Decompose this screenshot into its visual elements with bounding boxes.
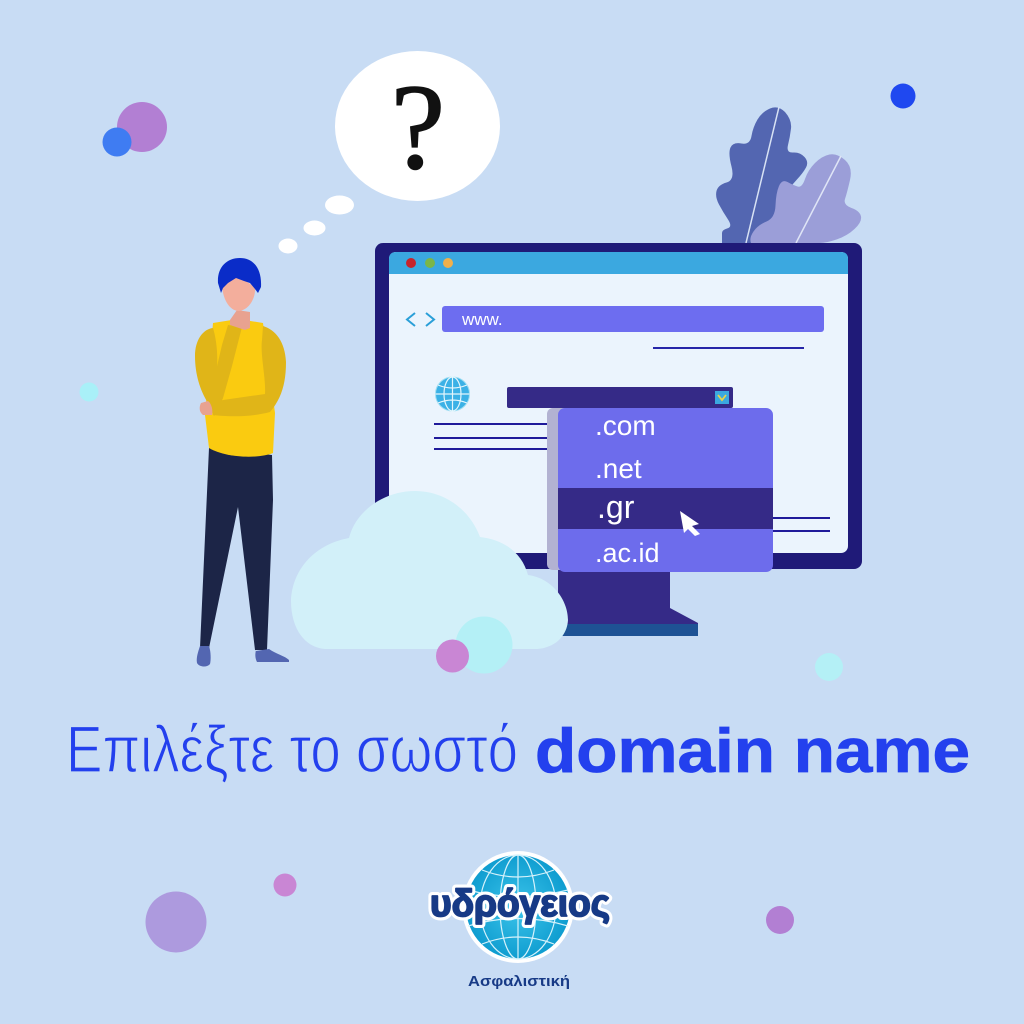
- logo: globe: υδρόγειος: [430, 883, 610, 925]
- cloud: [291, 491, 568, 649]
- dropdown menu: .com: [595, 410, 656, 441]
- hair: [218, 258, 261, 293]
- code brackets icon: [407, 313, 434, 326]
- title: [66, 712, 970, 786]
- text lines right: [770, 517, 830, 532]
- monitor: [375, 243, 862, 636]
- decorative circle: top right blue: [890, 84, 916, 108]
- dropdown menu: .net: [595, 453, 642, 484]
- dropdown menu: .gr: [597, 489, 635, 525]
- monitor stand: [558, 570, 698, 636]
- decorative circle: bottom left lilac: [146, 892, 206, 952]
- sweater sleeves: [195, 325, 286, 416]
- title: Επιλέξτε το σωστό: [66, 712, 518, 786]
- cloud circles: [436, 616, 512, 674]
- face: [222, 277, 255, 311]
- hand at elbow: [200, 401, 212, 415]
- address bar: [442, 306, 824, 332]
- trousers: [200, 448, 273, 650]
- decorative circle: bottom right purple: [766, 906, 794, 934]
- logo: globe: [430, 851, 610, 963]
- decorative circle: left cyan: [80, 382, 98, 402]
- decorative circles: top left: [102, 102, 167, 156]
- decorative circle: bottom left pink: [274, 874, 296, 896]
- person thinking: [195, 258, 289, 667]
- address bar: www.: [461, 310, 503, 329]
- browser title bar: [389, 252, 848, 274]
- sweater body: [205, 319, 275, 457]
- dropdown menu: [558, 408, 773, 572]
- plant leaves behind monitor: [716, 107, 861, 243]
- title: domain name: [535, 717, 970, 786]
- monitor frame: [375, 243, 862, 569]
- dropdown header bar: [507, 387, 733, 408]
- thought bubble with question mark: [278, 51, 500, 254]
- dropdown shadow: [547, 408, 587, 570]
- underline: [653, 347, 804, 349]
- monitor screen: [389, 252, 848, 553]
- dropdown menu: .ac.id: [595, 538, 660, 568]
- thought bubble with question mark: ?: [391, 60, 445, 195]
- cursor: [680, 511, 700, 536]
- logo subtitle: Ασφαλιστική: [468, 974, 570, 990]
- logo wordmark: υδρόγειος: [430, 883, 610, 925]
- decorative circle: right cyan: [815, 653, 843, 681]
- hand at chin: [230, 310, 250, 330]
- globe icon: [436, 377, 470, 411]
- shoes: [197, 646, 289, 667]
- text lines left: [434, 423, 560, 450]
